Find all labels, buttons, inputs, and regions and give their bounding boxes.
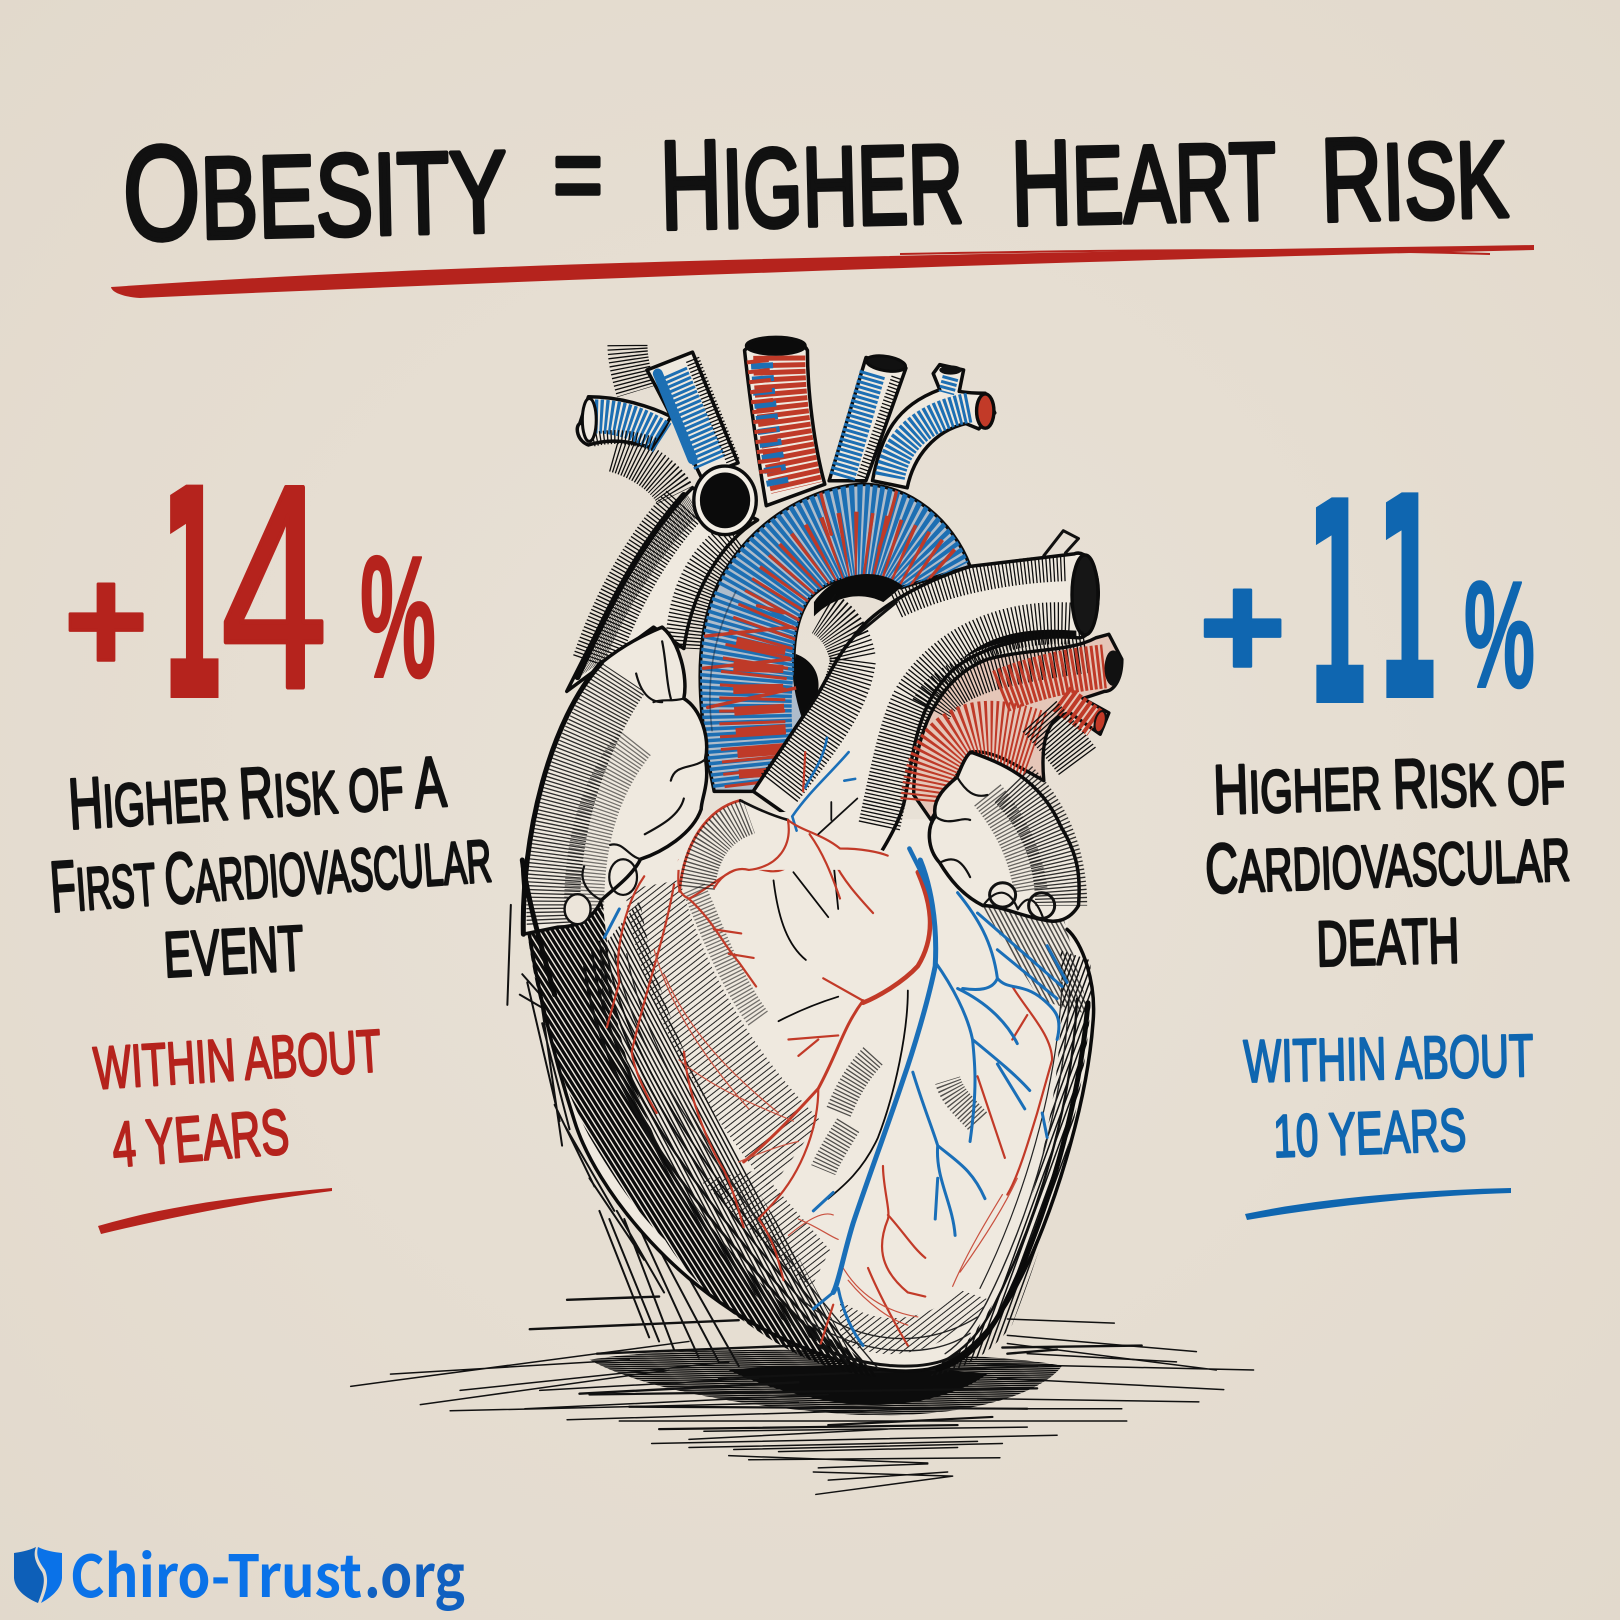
dark hatch behind vessels xyxy=(614,345,675,495)
right contour shading xyxy=(938,982,1088,1369)
stat: +11%: 1 xyxy=(1376,438,1439,763)
vessel: pulmonary trunk xyxy=(753,531,1098,856)
stat: +14%: 1 xyxy=(160,428,225,766)
ground shadow scribbles xyxy=(351,1297,1254,1494)
stat: +14% xyxy=(64,426,436,766)
title underline: red brush stroke xyxy=(111,245,1534,298)
panel: right atrial lobe xyxy=(909,752,1079,921)
text: right description: HIGHER RISK OF xyxy=(1212,740,1566,829)
text: left description: EVENT xyxy=(162,912,306,991)
coronary: black branches xyxy=(774,860,908,1199)
vessel: right blue xyxy=(829,353,907,481)
text: left time frame: WITHIN ABOUT xyxy=(92,1017,383,1102)
stat: +11%: 1 xyxy=(1306,443,1369,768)
title: HEART xyxy=(1010,111,1278,251)
text: right time frame xyxy=(1243,1022,1534,1170)
back hatching behind heart xyxy=(507,905,739,1366)
bottom contour xyxy=(818,1346,958,1366)
logo: Chiro-Trust.org: Chiro-Trust xyxy=(70,1530,362,1614)
title: HIGHER xyxy=(658,108,965,256)
vessel: central red and blue xyxy=(745,337,825,506)
coronary vessels and contours xyxy=(522,860,1094,1371)
text: left description: FIRST CARDIOVASCULAR xyxy=(48,817,494,928)
text: right time frame: 10 YEARS xyxy=(1272,1096,1467,1170)
title: RISK xyxy=(1319,110,1510,247)
sparse inner hatching xyxy=(823,1056,978,1170)
text: left time frame xyxy=(92,1017,383,1181)
icon: shield xyxy=(14,1547,62,1603)
vessel: red pulmonary veins xyxy=(914,634,1122,820)
text: right description xyxy=(1204,740,1571,980)
logo: Chiro-Trust.org: .org xyxy=(364,1530,465,1614)
text: left description: HIGHER RISK OF A xyxy=(66,742,448,845)
stat: +11% xyxy=(1199,438,1535,768)
stat: +14%: 4 xyxy=(221,426,327,750)
vessel: aortic arch xyxy=(700,484,970,791)
left contour shading xyxy=(584,942,878,1368)
vessel: right curved branch xyxy=(872,365,995,488)
ventricle shading xyxy=(522,880,1091,1378)
text: right description: DEATH xyxy=(1315,904,1460,980)
title xyxy=(121,108,1510,269)
heart left edge stroke xyxy=(522,860,555,995)
stat: +11%: % xyxy=(1464,550,1535,720)
vessel: left blue xyxy=(647,352,738,477)
mid crosshatch xyxy=(694,889,759,1019)
text: left description xyxy=(48,742,494,991)
title: OBESITY xyxy=(121,111,509,269)
conus arc and upper coronaries xyxy=(680,738,888,899)
coronary: red vessels xyxy=(607,860,1052,1346)
right underline xyxy=(1245,1188,1511,1220)
vessel: superior vena cava tube xyxy=(567,466,758,691)
ventricle conus patch xyxy=(675,800,896,870)
text: % xyxy=(360,519,436,714)
left underline xyxy=(98,1188,332,1234)
vessel: far-left branch xyxy=(577,397,671,449)
heart illustration xyxy=(351,337,1254,1494)
text: left time frame: 4 YEARS xyxy=(109,1095,292,1181)
panel: ventricle body xyxy=(522,819,1094,1371)
stat: +14%: + xyxy=(64,536,148,704)
group: great vessels and atria xyxy=(523,337,1122,934)
coronary: blue vessels xyxy=(604,860,1067,1346)
title: = xyxy=(553,113,603,236)
stat: +11%: + xyxy=(1199,542,1286,710)
panel: left atrial lobe xyxy=(523,627,707,934)
